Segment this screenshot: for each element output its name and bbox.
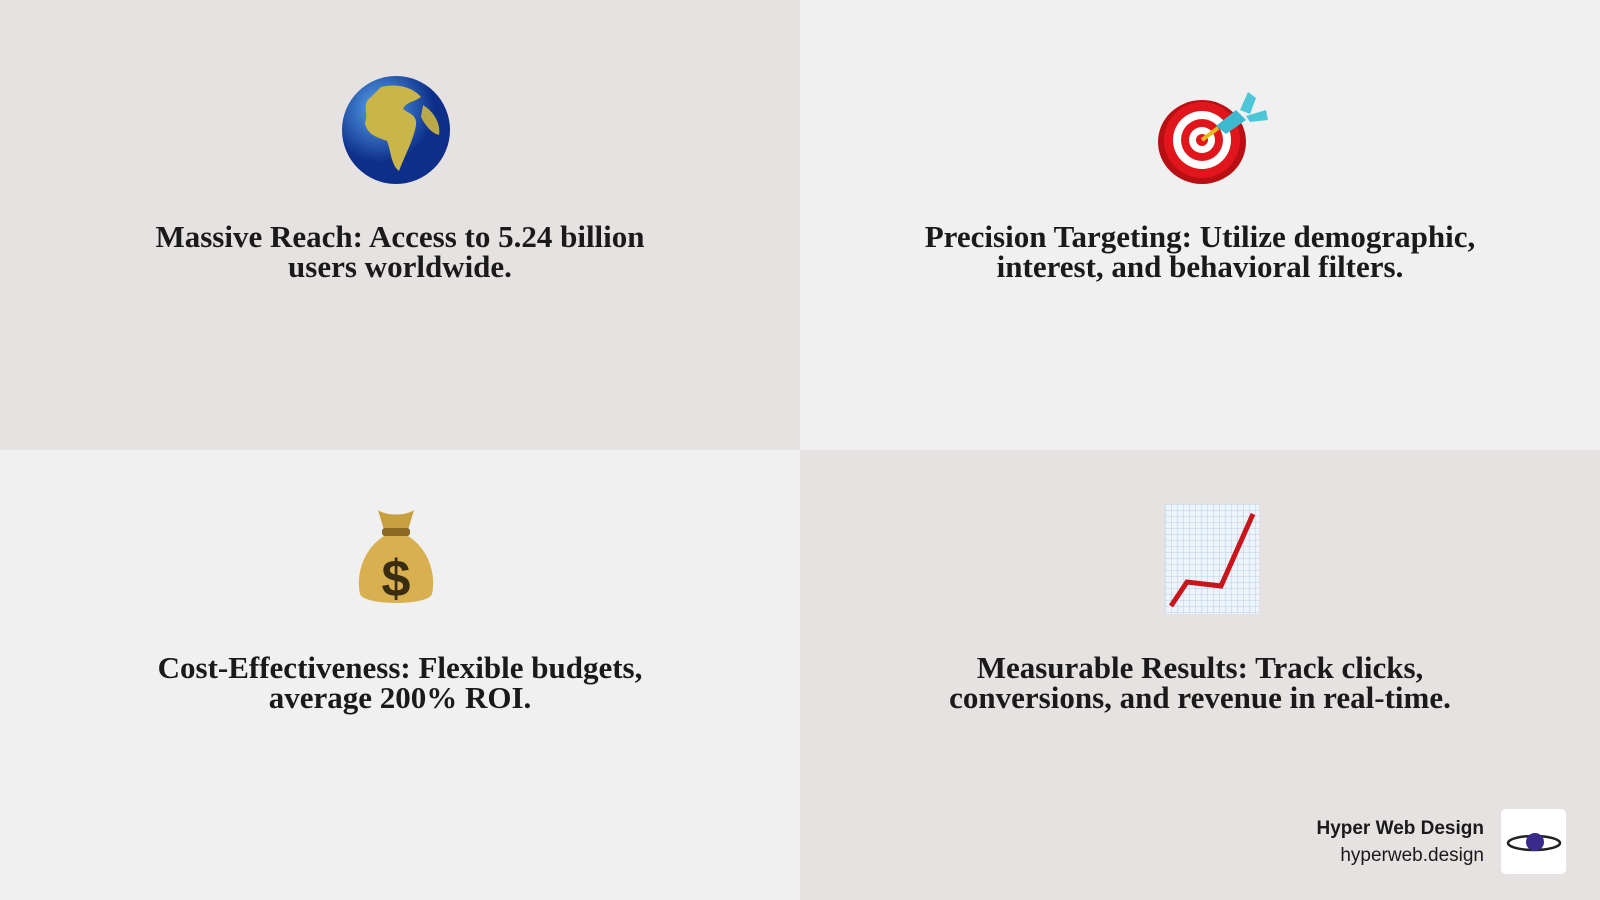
heading: cost-effectiveness: [158, 650, 642, 715]
brand text: [1316, 818, 1484, 866]
panel: massive reach: [0, 0, 800, 450]
heading: precision targeting: interest, and behavioral filters.: [997, 249, 1403, 284]
logo: [1501, 809, 1566, 874]
brand block: [1316, 809, 1566, 874]
icon: chart increasing: [1165, 504, 1259, 614]
icon: target with dart: [1158, 92, 1268, 184]
heading: massive reach: [155, 219, 645, 284]
heading: cost-effectiveness: average 200% ROI.: [269, 680, 531, 715]
heading: massive reach: Massive Reach: Access to 5.24 billion: [155, 219, 645, 254]
heading: measurable results: Measurable Results: Track clicks,: [977, 650, 1423, 685]
brand text: hyperweb.design: [1340, 845, 1484, 866]
heading: precision targeting: [925, 219, 1475, 284]
icon: money bag: [358, 510, 434, 608]
icon: money bag: $: [382, 550, 411, 608]
heading: measurable results: [949, 650, 1451, 715]
panel: measurable results: [800, 450, 1600, 900]
panel: cost-effectiveness: [0, 450, 800, 900]
heading: cost-effectiveness: Cost-Effectiveness: Flexible budgets,: [158, 650, 642, 685]
panel: precision targeting: [800, 0, 1600, 450]
heading: precision targeting: Precision Targeting: Utilize demographic,: [925, 219, 1475, 254]
heading: massive reach: users worldwide.: [288, 249, 512, 284]
icon: globe: [342, 76, 450, 184]
brand text: Hyper Web Design: [1316, 818, 1484, 839]
heading: measurable results: conversions, and revenue in real-time.: [949, 680, 1451, 715]
